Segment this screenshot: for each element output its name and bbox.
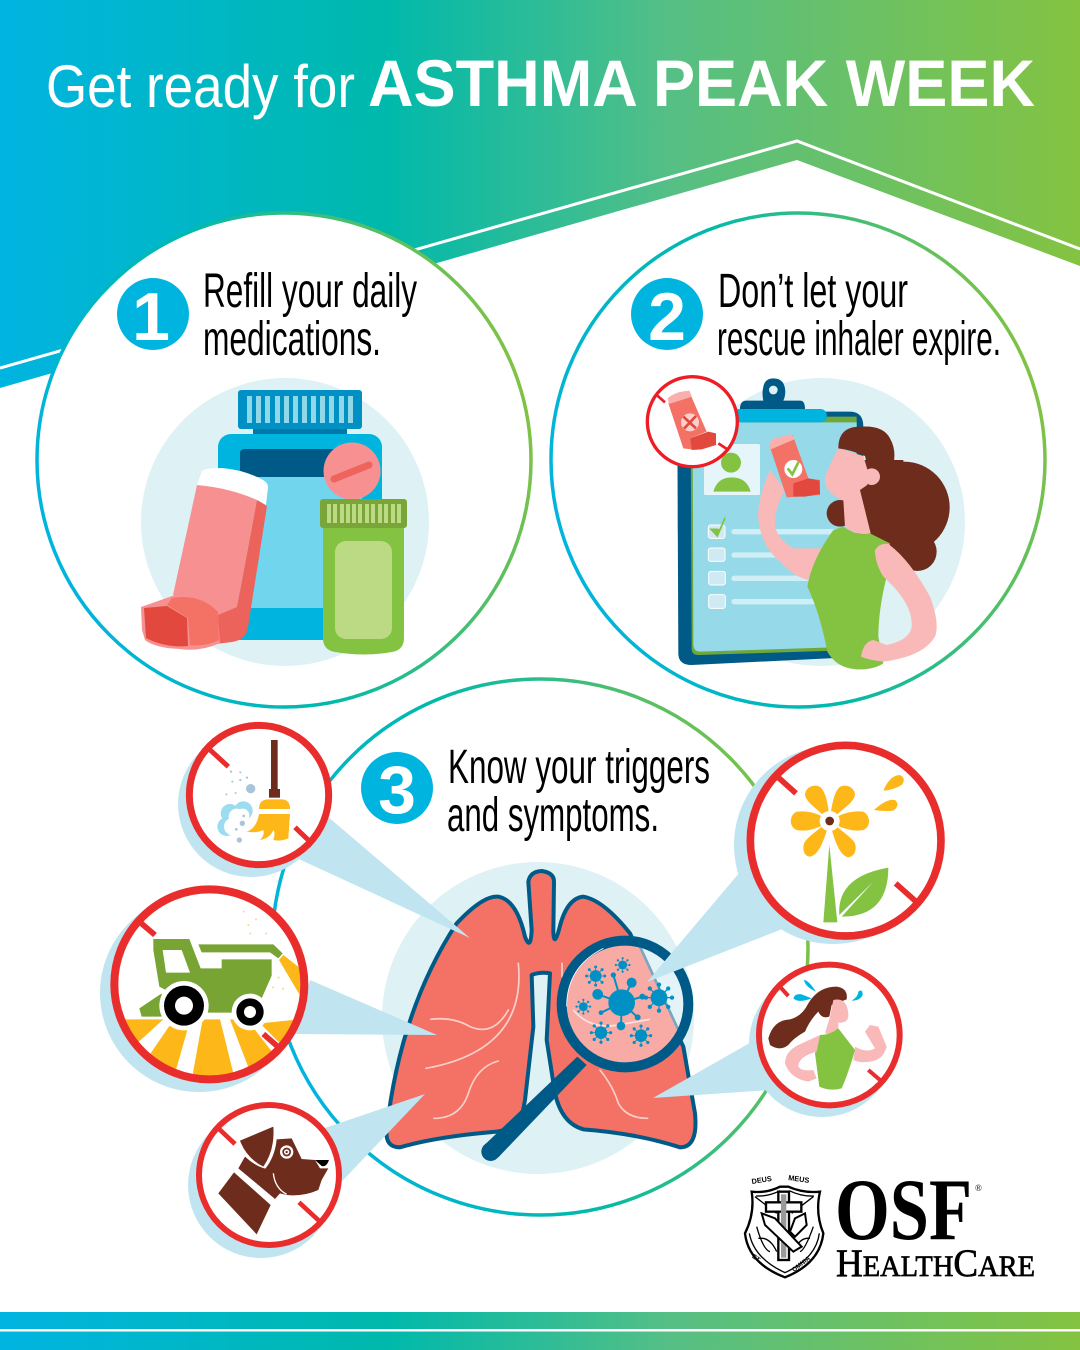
step 1 heading: medications. xyxy=(203,313,381,366)
woman: green top xyxy=(807,527,890,669)
step 3 number badge: 3 xyxy=(378,752,416,828)
woman: raised arm xyxy=(758,470,823,580)
logo wordmark: HEALTHCARE xyxy=(836,1242,1035,1285)
callout pointers from triggers to lungs xyxy=(290,810,790,1215)
icon: inhaler xyxy=(141,468,268,650)
trigger: farm harvester xyxy=(100,889,307,1092)
woman: face and neck xyxy=(825,448,871,534)
logo wordmark xyxy=(835,1162,1035,1285)
step 3 number badge xyxy=(361,752,433,828)
logo shield crest: DEUS xyxy=(751,1174,773,1186)
icon: large blue bottle xyxy=(218,390,382,640)
logo shield crest: MEUS xyxy=(788,1173,810,1185)
step 2 number badge xyxy=(631,278,703,355)
trigger: pollen flower xyxy=(734,745,941,944)
icon: clipboard xyxy=(677,378,863,665)
woman: hair top xyxy=(838,426,894,472)
logo wordmark: ® xyxy=(975,1183,982,1193)
icon: green bottle xyxy=(320,499,407,654)
panel: step 1 refill medications xyxy=(37,213,531,707)
panel: step 2 rescue inhaler xyxy=(551,213,1045,707)
title: Get ready for xyxy=(46,53,355,120)
title: ASTHMA PEAK WEEK xyxy=(368,46,1035,120)
header gradient banner xyxy=(0,0,1080,388)
step 1 heading xyxy=(203,265,417,366)
trigger: dust and sweeping xyxy=(178,725,329,877)
magnifying glass lens with germs xyxy=(562,938,703,1067)
trigger: exercise xyxy=(749,965,900,1117)
step 2 heading: Don’t let your xyxy=(718,265,908,318)
lungs xyxy=(386,871,696,1147)
panel: step 3 triggers and symptoms xyxy=(100,679,941,1258)
step 3 heading: Know your triggers xyxy=(448,741,710,794)
callout: expired inhaler crossed out xyxy=(647,377,737,467)
illustration: woman using inhaler with clipboard xyxy=(647,377,965,669)
magnifying glass handle xyxy=(481,1057,587,1161)
icon: inhaler with check mark xyxy=(769,434,820,497)
illustration: medication bottles and inhaler xyxy=(141,378,429,666)
logo shield crest: OMNIA xyxy=(791,1255,812,1274)
step 2 heading xyxy=(717,265,1001,366)
illustration: lungs with magnifying glass xyxy=(382,862,703,1174)
trigger: pet dog xyxy=(188,1105,339,1258)
step 1 number badge: 1 xyxy=(132,279,170,355)
footer gradient bar xyxy=(0,1312,1080,1350)
woman: hand-on-hip arm xyxy=(861,544,937,662)
woman: ear xyxy=(863,468,880,485)
logo shield crest xyxy=(745,1173,823,1277)
icon: pill xyxy=(324,442,380,500)
step 3 heading xyxy=(447,741,710,842)
woman: long hair xyxy=(827,460,950,571)
logo wordmark: OSF xyxy=(835,1162,972,1259)
step 1 number badge xyxy=(117,278,189,355)
step 2 number badge: 2 xyxy=(648,279,686,355)
title xyxy=(46,46,1035,120)
step 1 heading: Refill your daily xyxy=(203,265,417,318)
step 3 heading: and symptoms. xyxy=(447,789,659,842)
logo shield crest: ET xyxy=(751,1253,761,1264)
logo: OSF HealthCare xyxy=(745,1162,1035,1285)
